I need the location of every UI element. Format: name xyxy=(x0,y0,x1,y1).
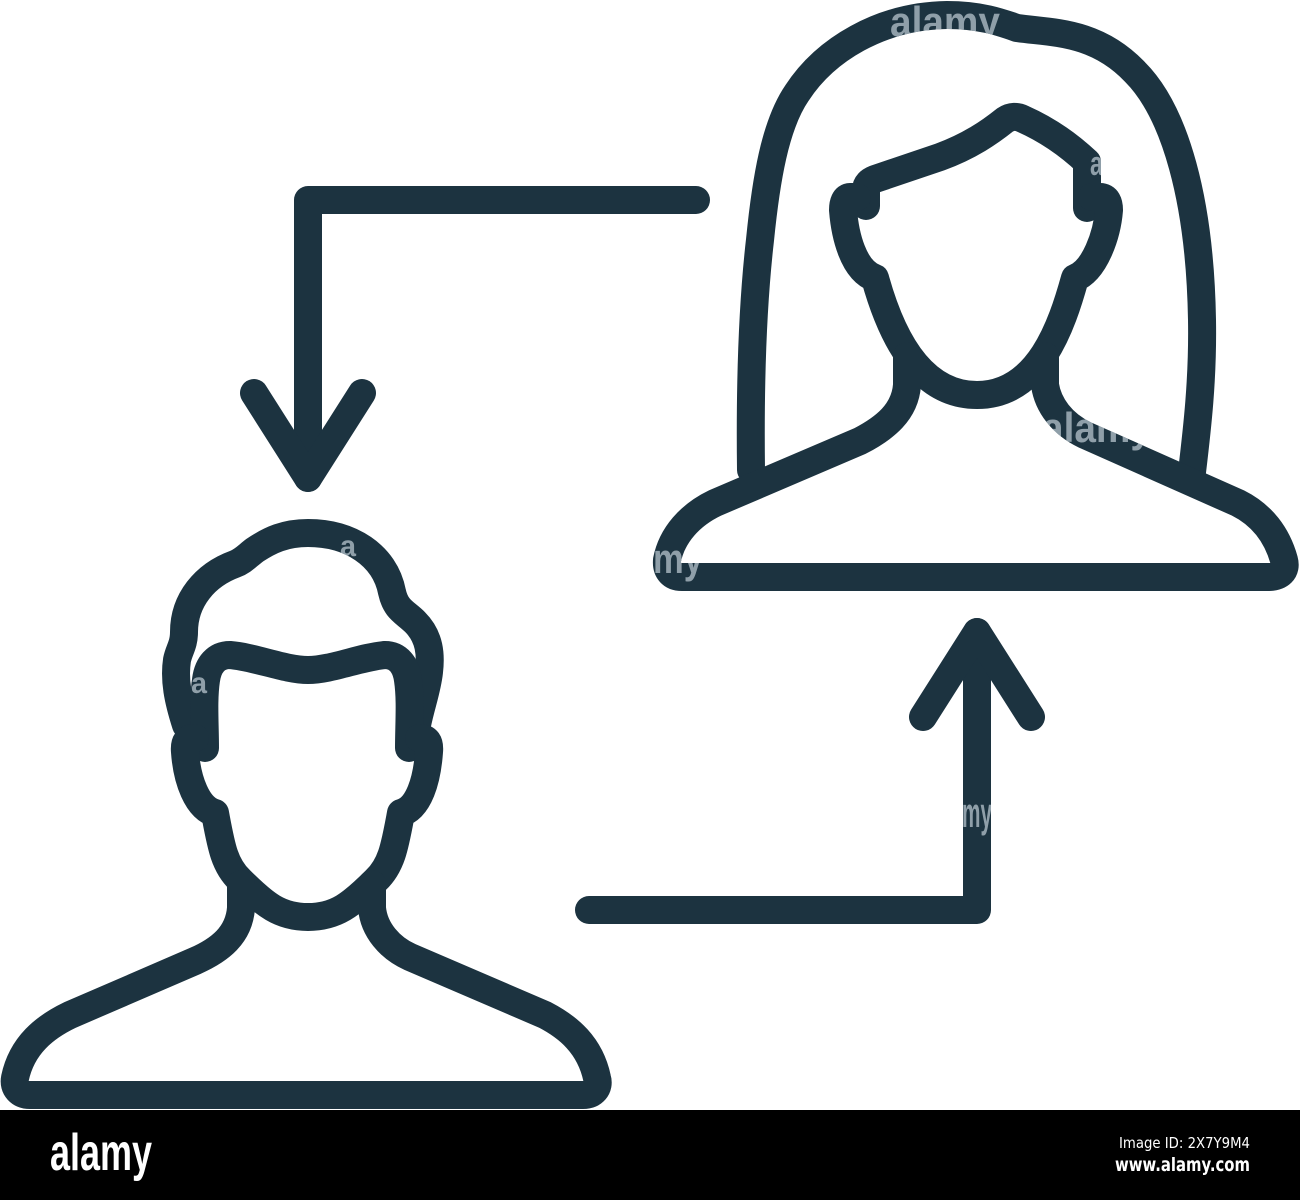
icon: man xyxy=(15,533,598,1095)
woman face and ears xyxy=(843,197,1109,395)
woman hairline xyxy=(866,117,1087,208)
watermarks: my xyxy=(653,535,704,582)
watermarks: a xyxy=(1090,145,1104,183)
arrow: from man up to woman xyxy=(589,632,1031,910)
watermarks: my xyxy=(962,789,992,836)
woman hair outline xyxy=(751,15,1202,472)
footer bar xyxy=(0,1110,1300,1200)
footer logo: alamy xyxy=(50,1124,152,1182)
watermarks: alamy xyxy=(1042,404,1153,451)
watermarks xyxy=(191,0,1153,836)
watermarks: a xyxy=(340,530,356,563)
man neck and shoulders xyxy=(15,884,598,1095)
footer website: www.alamy.com xyxy=(1115,1154,1250,1176)
watermarks: a xyxy=(191,667,207,700)
man fringe xyxy=(204,655,410,748)
icon: woman xyxy=(667,15,1285,577)
footer image id: Image ID: 2X7Y9M4 xyxy=(1119,1134,1250,1152)
man hair outline xyxy=(176,533,430,725)
man face and ears xyxy=(185,738,429,917)
woman neck and shoulders xyxy=(667,356,1285,577)
arrow: from woman down to man xyxy=(254,200,696,478)
